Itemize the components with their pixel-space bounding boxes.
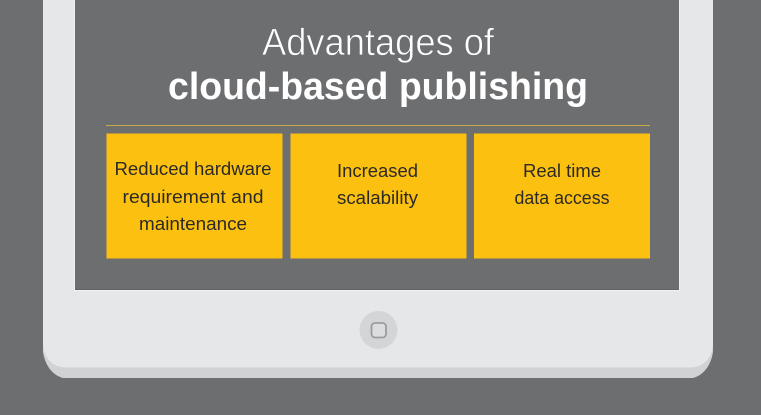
panel text: scalability: [337, 188, 418, 208]
panel text: Reduced hardware: [114, 159, 272, 179]
panel text: Real time: [523, 161, 601, 181]
title line 1: Advantages of: [262, 22, 494, 64]
title line 2: cloud-based publishing: [168, 66, 588, 108]
screen: [74, 0, 680, 291]
panel: increased scalability: [290, 134, 466, 258]
title: [168, 22, 588, 108]
tablet face: [43, 0, 713, 368]
home button: [360, 311, 398, 349]
panel text: requirement and: [122, 187, 264, 207]
tablet bottom edge shadow: [43, 340, 713, 378]
panel text: Increased: [337, 161, 418, 181]
panel: reduced hardware: [106, 134, 282, 258]
panel: real time data access: [474, 134, 650, 258]
panel text: maintenance: [139, 214, 247, 234]
panel text: data access: [514, 188, 610, 208]
divider: [106, 125, 650, 126]
